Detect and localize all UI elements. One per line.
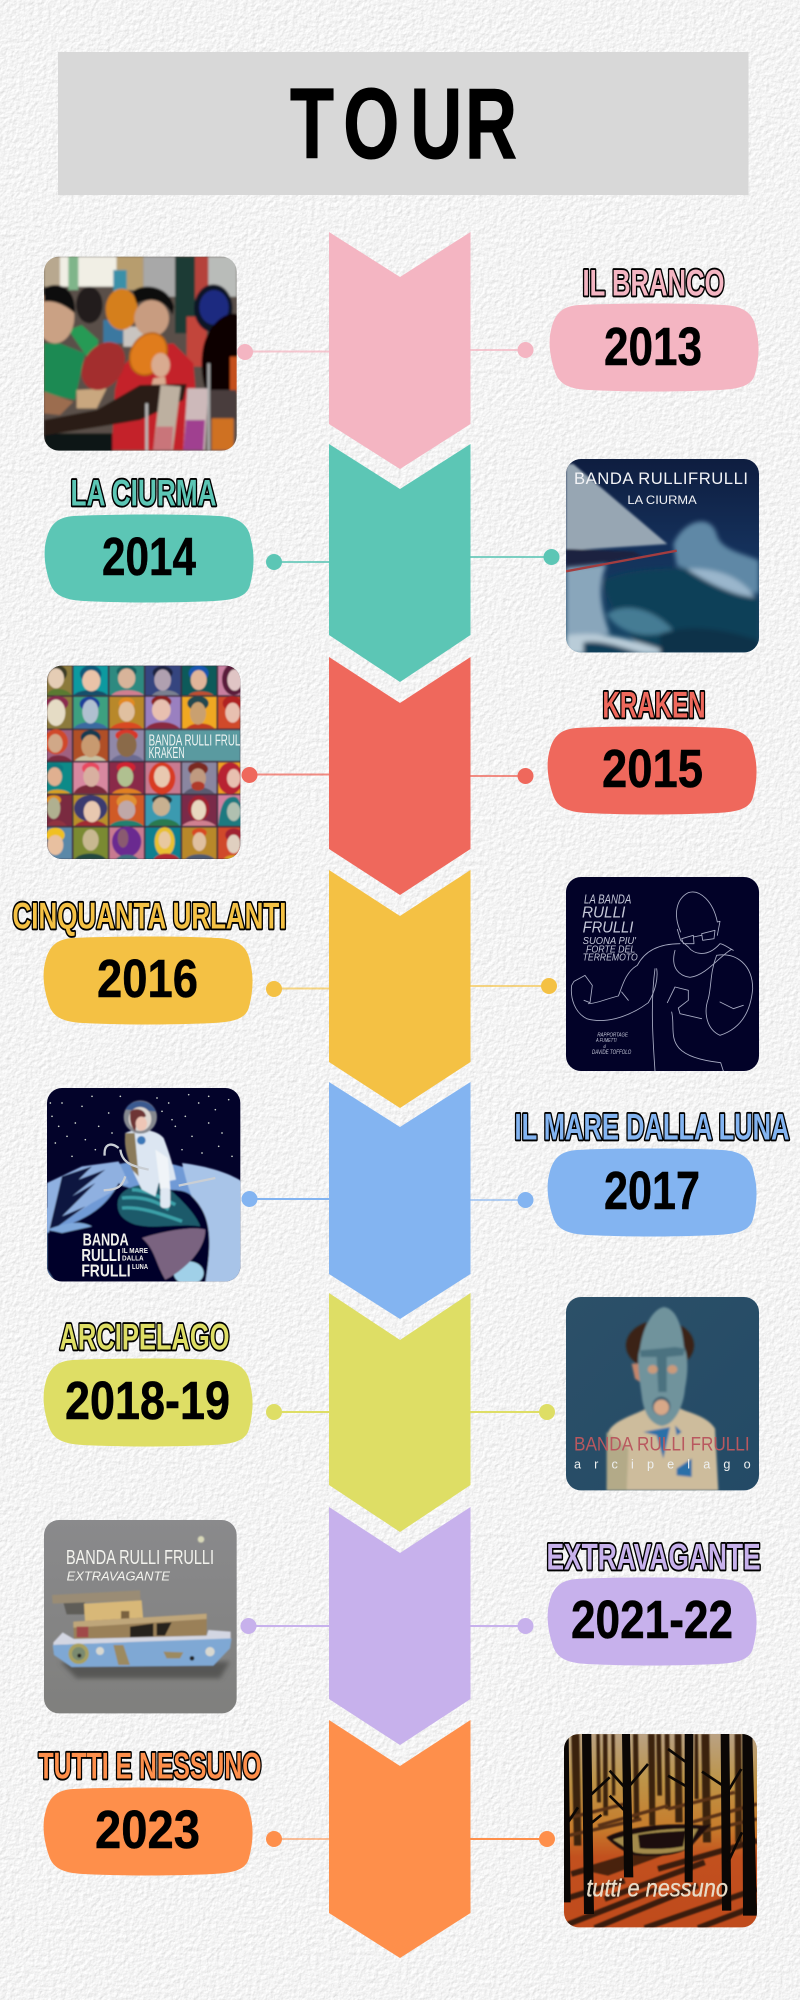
left connector — [266, 981, 329, 997]
timeline step: Il Mare dalla Luna 2017 — [17, 1082, 790, 1418]
year pill: 2014 — [102, 527, 196, 587]
cover album title: EXTRAVAGANTE — [67, 1569, 171, 1584]
cover title lines: SUONA PIU' — [583, 936, 637, 947]
cover band name — [82, 1234, 148, 1276]
album name: TUTTI E NESSUNO — [38, 1746, 262, 1786]
album name: KRAKEN — [602, 684, 706, 726]
timeline step: Extravagante 2021-22 — [40, 1507, 760, 1745]
cover title lines: RAPPORTAGE — [597, 1033, 628, 1039]
right connector — [470, 768, 534, 784]
right connector — [470, 342, 534, 358]
right connector — [470, 1404, 555, 1420]
cover subtitle: KRAKEN — [149, 745, 185, 762]
left connector — [237, 344, 329, 360]
timeline step: La Ciurma 2014 — [45, 444, 767, 682]
album cover: Arcipelago — [566, 1297, 759, 1490]
title banner — [58, 52, 748, 195]
cover title lines: RULLI — [582, 904, 626, 921]
right connector — [470, 1831, 555, 1847]
album cover: Il Mare dalla Luna — [47, 1088, 240, 1282]
cover band name: DALLA — [122, 1253, 144, 1262]
year pill — [548, 1578, 757, 1666]
year pill — [44, 936, 253, 1024]
right connector — [470, 1192, 534, 1208]
chevron — [329, 1507, 470, 1745]
left connector — [242, 1191, 329, 1207]
timeline step: Tutti e Nessuno 2023 — [38, 1720, 765, 1958]
chevron — [329, 1293, 470, 1532]
year pill: 2017 — [604, 1161, 700, 1221]
chevron — [329, 1720, 470, 1958]
cover title lines: LA BANDA — [584, 892, 631, 907]
cover band name: BANDA — [83, 1230, 129, 1250]
cover title: BANDA RULLI FRUL — [149, 732, 241, 749]
year pill — [44, 1788, 253, 1876]
left connector — [242, 767, 329, 783]
cover album title: tutti e nessuno — [586, 1876, 728, 1903]
cover title lines: FRULLI — [583, 919, 634, 936]
album cover: La Ciurma — [566, 459, 759, 652]
chevron — [329, 232, 470, 469]
timeline step: Kraken 2015 — [42, 657, 757, 895]
chevron — [329, 870, 470, 1108]
chevron — [329, 657, 470, 895]
album name: CINQUANTA URLANTI — [12, 896, 286, 936]
left connector — [266, 554, 329, 570]
timeline step: Il Branco 2013 — [36, 232, 759, 469]
album cover: Tutti e Nessuno — [564, 1734, 757, 1928]
cover title lines: di — [603, 1044, 607, 1049]
album name: IL BRANCO — [582, 262, 724, 304]
line drawing: muscular man — [571, 892, 753, 1071]
year pill: 2021-22 — [571, 1590, 733, 1650]
left connector — [266, 1404, 329, 1420]
year pill — [550, 304, 759, 392]
cover title lines — [582, 892, 638, 1056]
right connector — [470, 549, 560, 565]
album name: LA CIURMA — [70, 472, 216, 514]
year pill: 2015 — [602, 739, 703, 799]
cover band name: FRULLI — [81, 1261, 131, 1281]
cover band name: BANDA RULLI FRULLI — [66, 1547, 214, 1569]
album cover: Cinquanta Urlanti — [566, 877, 759, 1071]
year pill: 2016 — [97, 949, 198, 1009]
cover band name: RULLI — [81, 1245, 121, 1265]
cover title lines: TERREMOTO — [583, 953, 638, 964]
cover band name: IL MARE — [122, 1246, 148, 1255]
left connector — [266, 1831, 329, 1847]
cover title: BANDA RULLIFRULLI — [574, 469, 748, 488]
album name: ARCIPELAGO — [60, 1316, 230, 1358]
title: TOUR — [290, 68, 517, 180]
right connector — [470, 978, 557, 994]
year pill — [548, 1148, 757, 1236]
chevron — [329, 1082, 470, 1319]
timeline step: Arcipelago 2018-19 — [44, 1292, 767, 1532]
cover subtitle: LA CIURMA — [627, 493, 697, 507]
year pill: 2013 — [604, 317, 702, 377]
year pill — [45, 514, 254, 602]
year pill — [44, 1358, 253, 1446]
left connector — [240, 1618, 329, 1634]
cover title lines: FORTE DEL — [586, 944, 635, 955]
album cover: Extravagante — [44, 1520, 237, 1714]
cover band name: BANDA RULLI FRULLI — [574, 1435, 750, 1456]
cover album title: arcipelago — [574, 1458, 751, 1472]
right connector — [470, 1618, 534, 1634]
chevron — [329, 444, 470, 682]
year pill — [548, 726, 757, 814]
timeline step: Cinquanta Urlanti 2016 — [12, 870, 767, 1108]
year pill: 2018-19 — [65, 1371, 230, 1431]
cover band name: LUNA — [132, 1262, 149, 1271]
cover title lines: DAVIDE TOFFOLO — [592, 1049, 631, 1056]
year pill: 2023 — [95, 1800, 200, 1860]
cover title lines: A FUMETTI — [595, 1038, 617, 1044]
album photo: band playing — [44, 256, 237, 451]
album cover: Kraken — [47, 666, 240, 859]
